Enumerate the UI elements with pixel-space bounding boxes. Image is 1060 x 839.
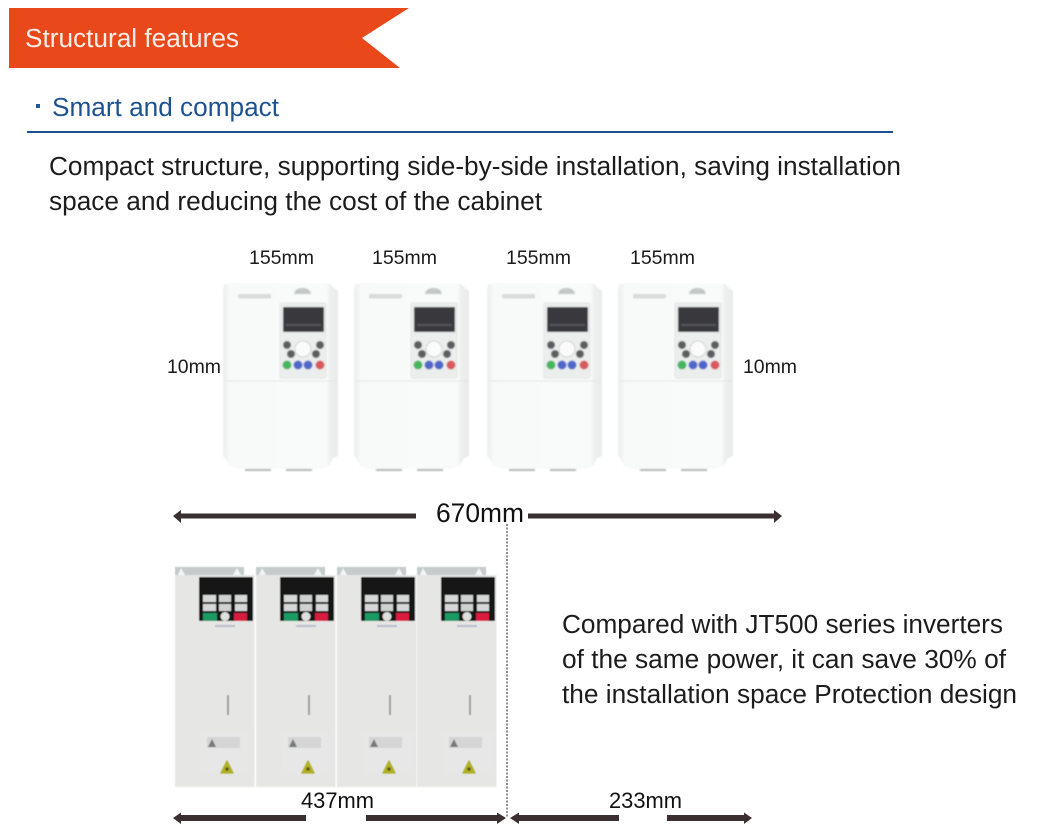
- description text: space and reducing the cost of the cabinet: [49, 186, 543, 216]
- comparison text: Compared with JT500 series inverters: [562, 609, 1003, 639]
- title banner: Structural features: [9, 8, 409, 68]
- 437mm dimension arrow: 437mm: [301, 788, 374, 813]
- width labels above new inverters: 155mm: [372, 247, 437, 269]
- right gap label: 10mm: [743, 356, 797, 378]
- 670mm dimension arrow: [173, 498, 782, 528]
- 233mm dimension arrow: [510, 788, 752, 824]
- section heading: Smart and compact: Smart and compact: [52, 92, 280, 122]
- description text: Compact structure, supporting side-by-side installation, saving installation: [49, 151, 901, 181]
- title banner: Structural features: Structural features: [25, 23, 239, 53]
- width labels above new inverters: 155mm: [506, 247, 571, 269]
- comparison text: the installation space Protection design: [562, 679, 1017, 709]
- width labels above new inverters: 155mm: [630, 247, 695, 269]
- width labels above new inverters: 155mm: [249, 247, 314, 269]
- comparison text: [562, 609, 1017, 709]
- left gap label: 10mm: [167, 356, 221, 378]
- width labels above new inverters: [249, 247, 695, 269]
- 233mm dimension arrow: 233mm: [609, 788, 682, 813]
- 437mm dimension arrow: [173, 788, 506, 824]
- 670mm dimension arrow: 670mm: [436, 498, 524, 528]
- JT500 inverters row: [175, 567, 496, 787]
- new compact inverters row: [223, 283, 733, 471]
- description text: [49, 151, 901, 216]
- comparison text: of the same power, it can save 30% of: [562, 644, 1007, 674]
